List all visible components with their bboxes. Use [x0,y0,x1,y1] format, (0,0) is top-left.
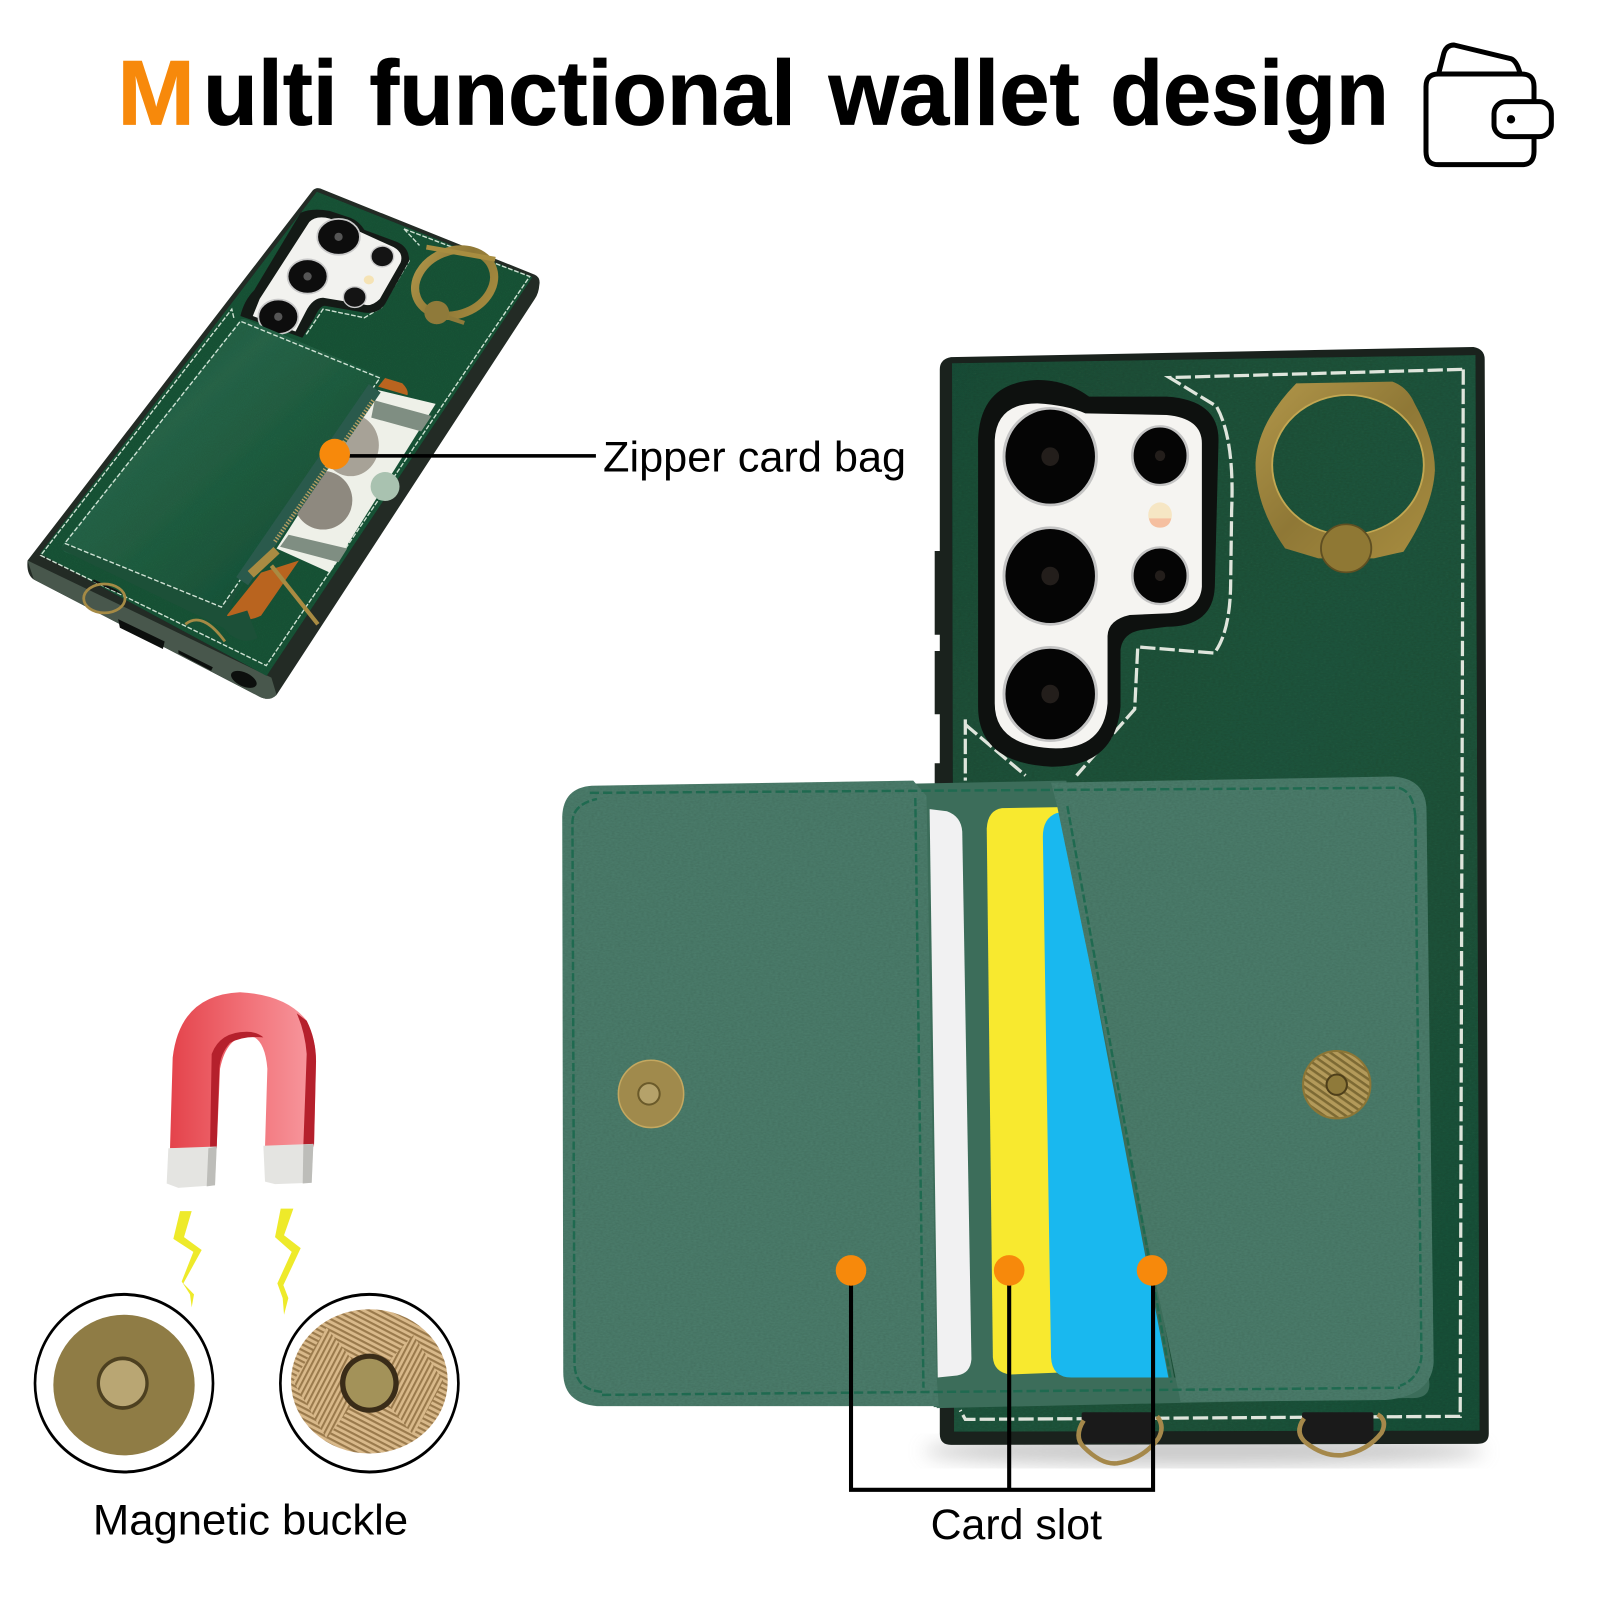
bottom ports [118,619,213,671]
cash and coins [277,390,436,573]
zipper pocket [62,319,382,610]
bottom strip [934,1378,1429,1408]
strap rings [84,579,225,641]
camera island [240,210,409,338]
callout line: zipper card bag [337,454,596,458]
lenses [1004,408,1096,505]
label: zipper card bag: Zipper card bag [603,433,906,481]
left flap [562,781,939,1406]
orange leather tab [227,378,408,620]
inner back panel [913,781,1179,1407]
title [117,42,1389,144]
right flap [1051,777,1434,1402]
title: ulti [203,42,338,144]
lightning bolts [173,1211,202,1307]
side buttons [935,551,941,806]
left magnetic snap [618,1060,684,1128]
flash [1148,502,1172,528]
callout dots: card slot [836,1255,1167,1286]
magnet poles [167,1144,313,1188]
camera cutout [978,380,1219,767]
wallet top and bottom stitches [590,788,1415,1395]
left buckle disc [53,1315,195,1455]
phone leather back [40,192,532,676]
title: design [1110,42,1389,144]
wallet open panel [562,777,1434,1463]
phone bumper [27,188,540,699]
D rings [1079,1412,1384,1463]
stitching [960,369,1463,1419]
title: wallet [828,42,1080,144]
large phone [923,347,1489,1465]
title: functional [369,42,796,144]
white card [930,809,971,1378]
leather [952,355,1480,1432]
right buckle disc [291,1309,448,1453]
buckle outline circles [35,1294,213,1472]
title: M [117,42,195,144]
stitching [41,229,530,666]
small phone with zipper card bag [27,188,540,699]
magnet illustration [35,992,458,1472]
callout dot: zipper card bag [319,439,350,469]
bumper [940,347,1489,1445]
ring holder [1256,382,1435,572]
yellow card [987,807,1061,1374]
soft shadow [923,1437,1485,1465]
right magnetic snap [1303,1051,1370,1118]
zip pull [251,550,318,624]
callout bracket: card slot [851,1276,1153,1490]
metal ring [405,238,504,327]
label: card slot: Card slot [931,1501,1102,1549]
lenses [317,219,360,255]
icon: wallet [1426,45,1551,165]
label: magnetic buckle: Magnetic buckle [93,1497,408,1545]
blue card [1043,812,1168,1378]
